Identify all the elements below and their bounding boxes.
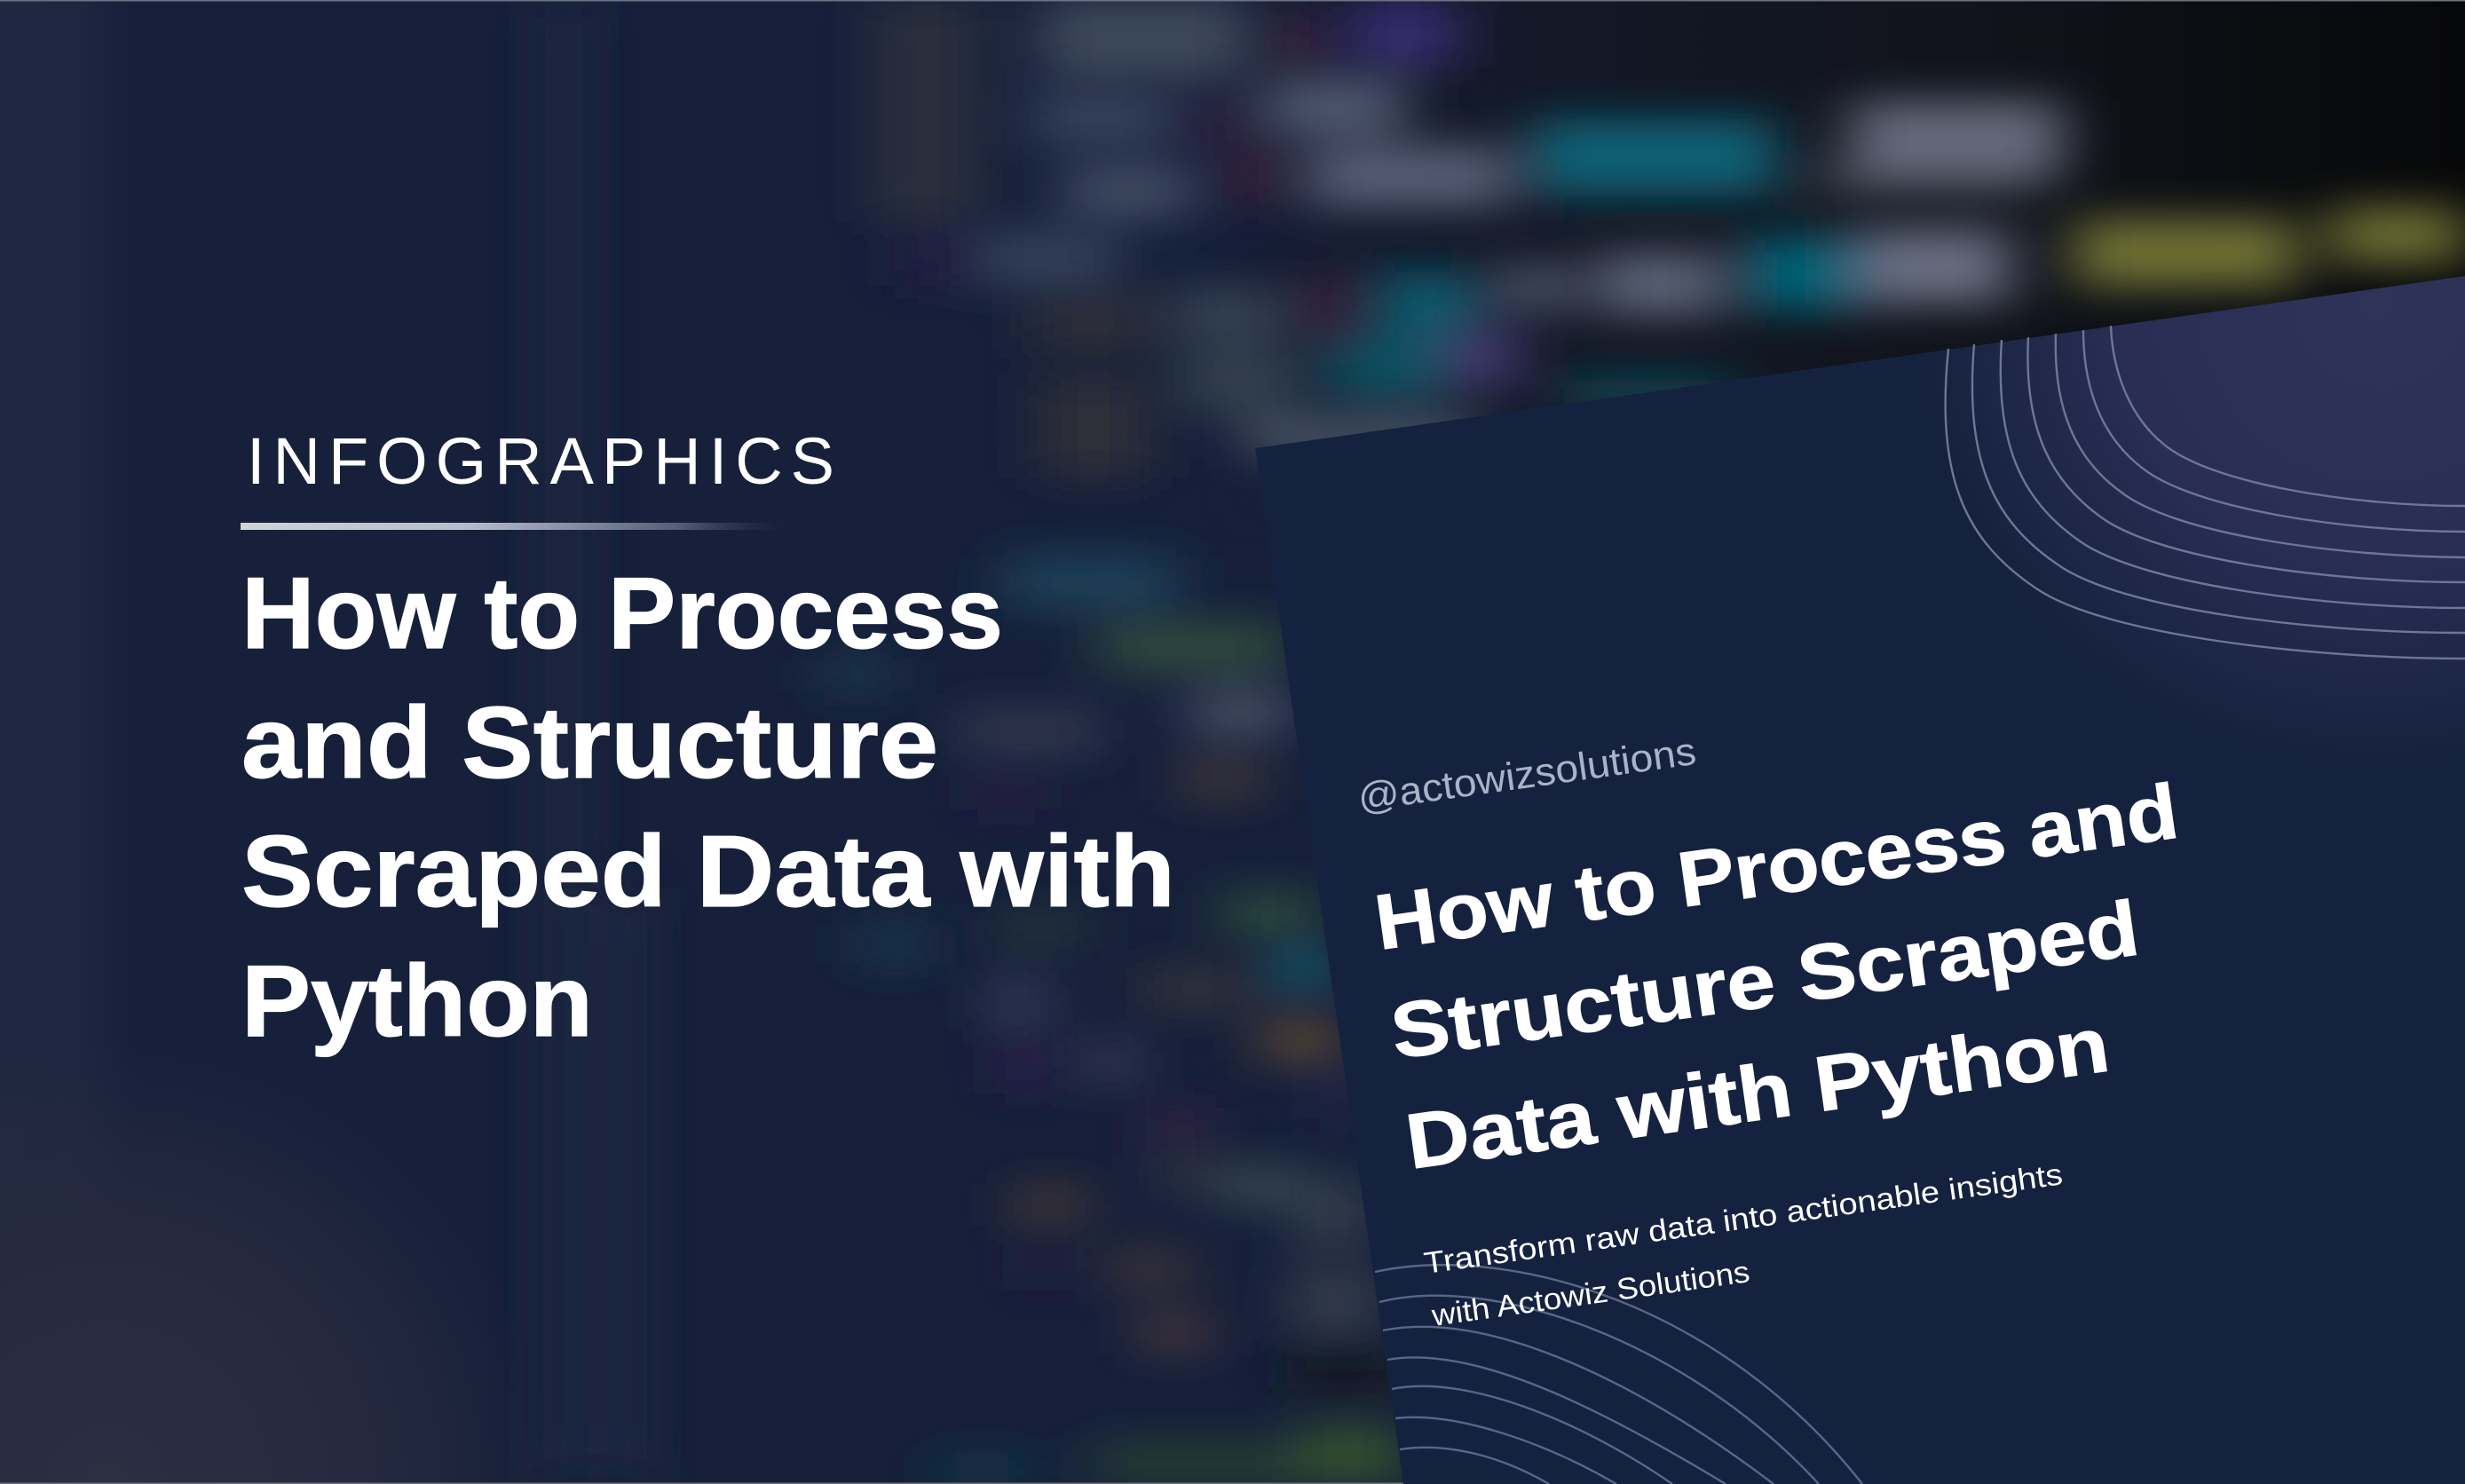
- cover title: [1370, 767, 2184, 1186]
- eyebrow: INFOGRAPHICS: INFOGRAPHICS: [247, 424, 834, 498]
- panel: tilted report cover: [1255, 276, 2465, 1484]
- cover title: Structure Scraped: [1386, 884, 2144, 1076]
- main title: Scraped Data with: [241, 816, 1175, 928]
- divider rule under eyebrow: [241, 523, 786, 530]
- main title: and Structure: [241, 687, 938, 800]
- handle: @actowizsolutions: @actowizsolutions: [1355, 730, 1699, 820]
- cover subtitle: with Actowiz Solutions: [1429, 1255, 1752, 1333]
- decorative arcs: bottom left: [1375, 1265, 1862, 1484]
- main title: [241, 557, 1175, 1058]
- main title: Python: [241, 945, 593, 1058]
- cover title: How to Process and: [1370, 767, 2184, 967]
- main title: How to Process: [241, 557, 1003, 670]
- cover sheet: [1255, 276, 2465, 1484]
- cover subtitle: [1422, 1157, 2065, 1333]
- decorative arcs: top right: [1946, 326, 2465, 659]
- cover subtitle: Transform raw data into actionable insights: [1422, 1157, 2065, 1281]
- cover title: Data with Python: [1401, 1000, 2114, 1186]
